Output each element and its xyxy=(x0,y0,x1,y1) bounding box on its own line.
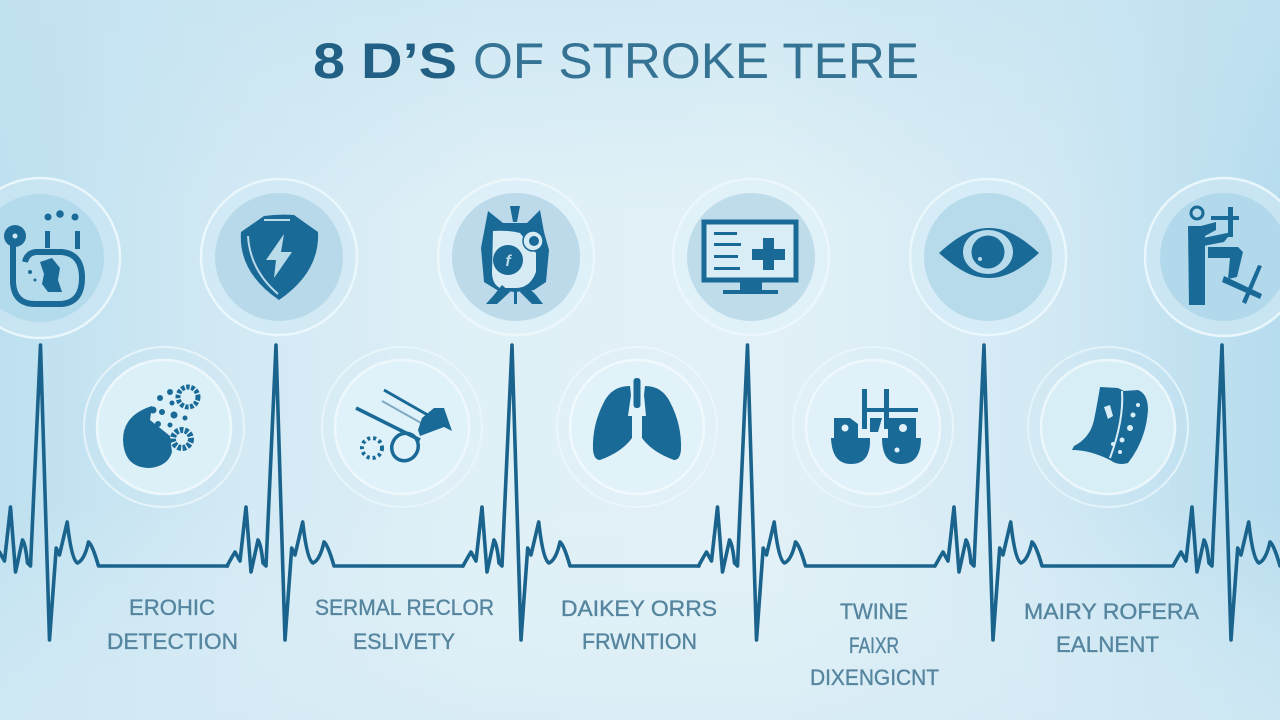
lower icon circle 5 xyxy=(1028,347,1188,507)
icon: medical monitor xyxy=(704,222,796,294)
label 5: EALNENT xyxy=(1056,632,1159,657)
label 2: SERMAL RECLOR xyxy=(315,595,494,620)
label 1: DETECTION xyxy=(107,629,238,654)
lower icon circle 3 xyxy=(557,347,717,507)
lower icon circle 4 xyxy=(793,347,953,507)
label 2: ESLIVETY xyxy=(353,629,455,654)
icon: curved strip with spots xyxy=(1072,387,1148,464)
icon: tool with splash xyxy=(356,390,452,466)
upper icon circle 1 xyxy=(0,178,120,338)
label 4: TWINE xyxy=(840,599,908,624)
label 3: FRWNTION xyxy=(582,629,697,654)
label 1 xyxy=(107,595,238,654)
label 5 xyxy=(1024,599,1199,657)
lower icon circle 1 xyxy=(84,347,244,507)
title: OF STROKE TERE xyxy=(473,33,919,89)
label 2 xyxy=(315,595,494,654)
label 3: DAIKEY ORRS xyxy=(561,596,717,621)
icon: lungs xyxy=(593,378,681,460)
icon: shield with lightning xyxy=(241,215,318,300)
label 1: EROHIC xyxy=(129,595,215,620)
lower icon circle 2 xyxy=(322,347,482,507)
upper icon circle 3 xyxy=(438,179,594,335)
icon: owl-shaped device xyxy=(481,206,549,304)
label 3 xyxy=(561,596,717,654)
icon: eye xyxy=(939,228,1039,278)
label 5: MAIRY ROFERA xyxy=(1024,599,1199,624)
upper icon circle 2 xyxy=(201,179,357,335)
upper icon circle 4 xyxy=(673,179,829,335)
icon: brain blob with gears xyxy=(123,387,198,468)
icon: twin bowls with pipes xyxy=(831,389,921,464)
icon: owl-shaped device: f xyxy=(505,253,512,270)
upper icon circle 5 xyxy=(910,179,1066,335)
label 4: FAIXR xyxy=(849,633,899,658)
label 4: DIXENGICNT xyxy=(810,665,939,690)
icon: person with therapy equipment xyxy=(1188,207,1262,305)
heartbeat ECG line xyxy=(0,345,1280,640)
title: 8 D’S xyxy=(313,33,457,89)
upper icon circle 6 xyxy=(1145,178,1280,336)
icon: monitor device xyxy=(4,210,82,304)
label 4 xyxy=(810,599,939,690)
